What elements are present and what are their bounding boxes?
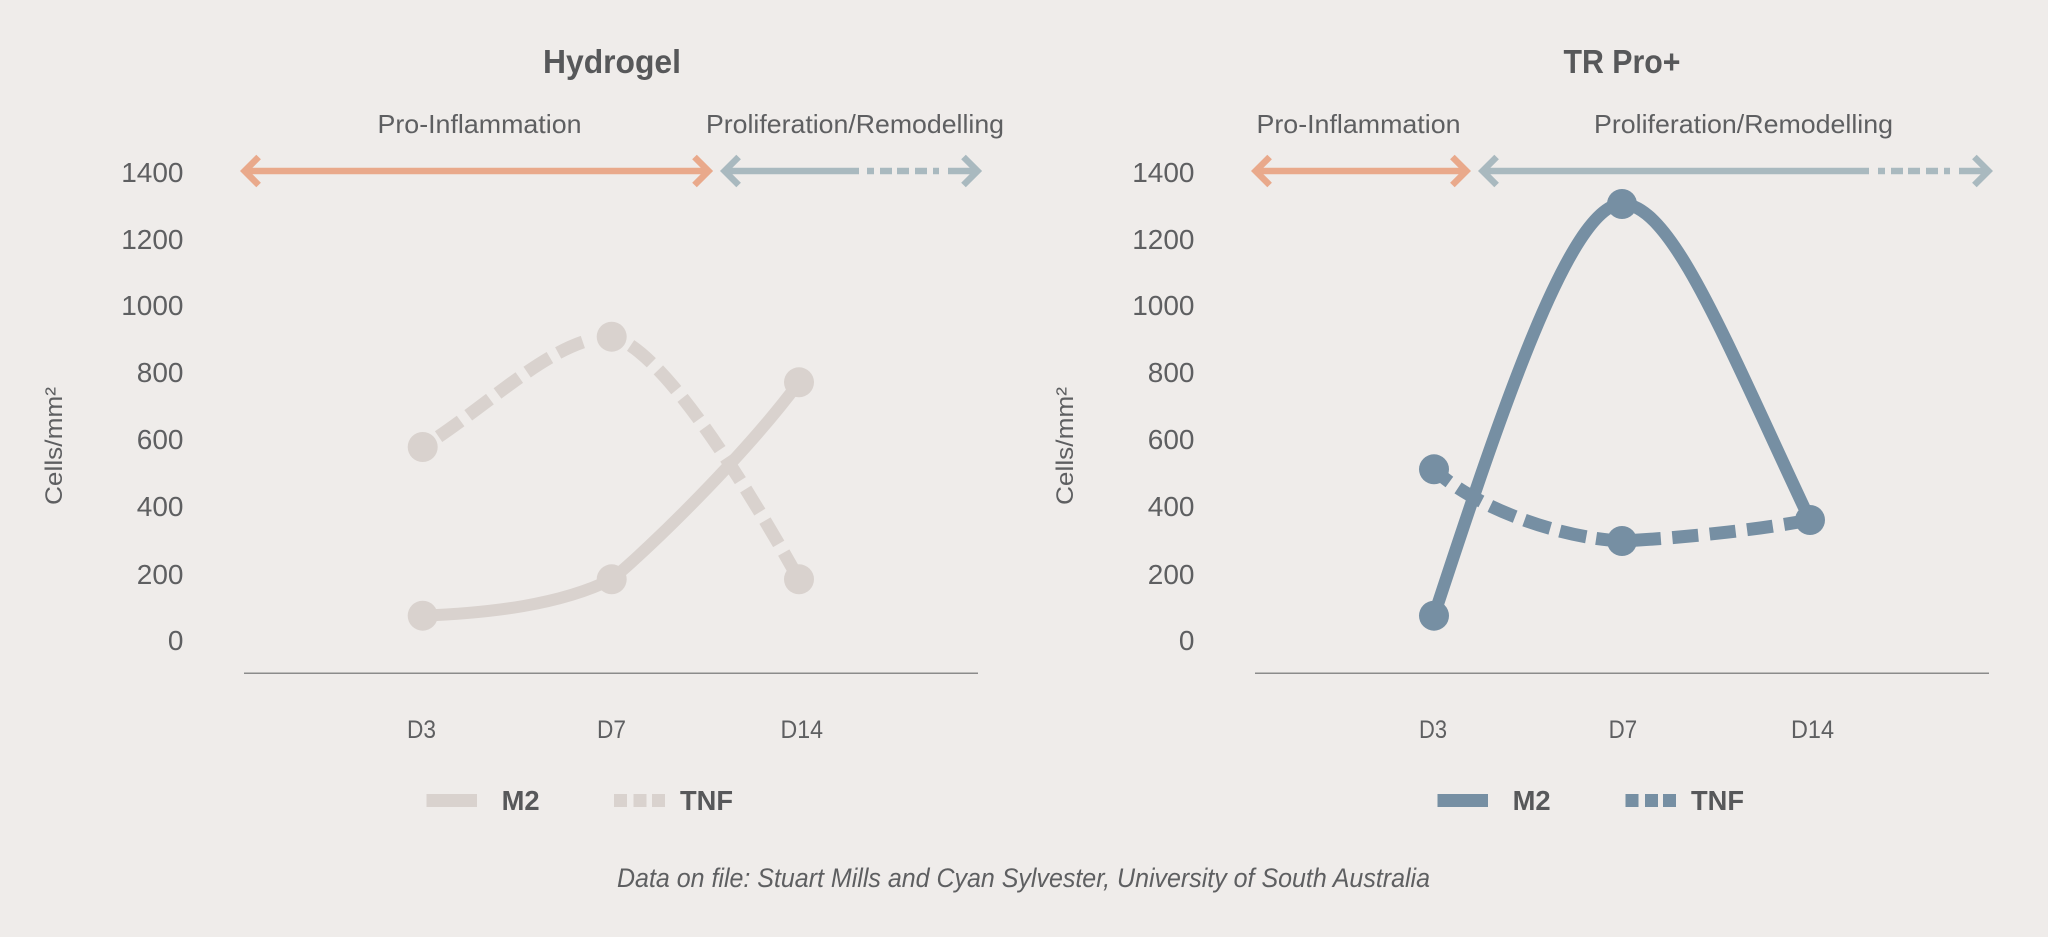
phase label: Proliferation/Remodelling: Proliferation/Remodelling — [1594, 109, 1893, 139]
panel: TR Pro+ chart — [1052, 43, 1989, 816]
y axis labels — [121, 157, 184, 656]
x axis labels — [1419, 716, 1834, 744]
y axis labels: 600 — [1148, 424, 1194, 455]
legend: Hydrogel — [426, 785, 733, 816]
y axis labels: 0 — [168, 625, 184, 656]
x axis labels: D7 — [1609, 716, 1637, 744]
y axis labels: 200 — [1148, 559, 1194, 590]
x axis line — [244, 672, 978, 674]
y axis labels: 200 — [137, 559, 184, 590]
y axis labels: 400 — [137, 491, 184, 522]
x axis labels — [407, 716, 823, 744]
y axis title: Cells/mm² — [1052, 387, 1079, 505]
legend: TR Pro+ — [1438, 785, 1744, 816]
phase label: Proliferation/Remodelling: Proliferation/Remodelling — [706, 109, 1004, 139]
data points Hydrogel — [408, 322, 814, 631]
phase label: Pro-Inflammation: Pro-Inflammation — [1256, 109, 1460, 139]
x axis labels: D3 — [407, 716, 436, 744]
legend: Hydrogel: M2 — [502, 785, 540, 816]
y axis labels: 1200 — [121, 224, 184, 255]
phase label: Pro-Inflammation: Pro-Inflammation — [378, 109, 582, 139]
x axis labels: D3 — [1419, 716, 1447, 744]
y axis labels: 800 — [137, 357, 184, 388]
y axis labels: 1400 — [121, 157, 184, 188]
arrow: proliferation span — [725, 157, 978, 185]
y axis labels: 1400 — [1132, 157, 1194, 188]
line: M2 Hydrogel — [423, 382, 799, 616]
panel: Hydrogel chart — [41, 43, 1004, 816]
arrow: pro-inflammation span — [1256, 157, 1466, 185]
y axis labels: 1000 — [1132, 290, 1194, 321]
line: TNF TR Pro+ — [1434, 469, 1810, 541]
heading: TR Pro+: TR Pro+ — [1564, 43, 1680, 80]
y axis labels: 400 — [1148, 491, 1194, 522]
x axis labels: D7 — [597, 716, 626, 744]
heading: Hydrogel: Hydrogel — [543, 43, 681, 80]
data points TR Pro+ — [1419, 189, 1825, 631]
arrow: proliferation span — [1483, 157, 1988, 185]
arrow: pro-inflammation span — [245, 157, 708, 185]
y axis labels: 800 — [1148, 357, 1194, 388]
legend: TR Pro+: M2 — [1513, 785, 1551, 816]
y axis labels: 0 — [1179, 625, 1194, 656]
x axis labels: D14 — [780, 716, 823, 744]
x axis labels: D14 — [1791, 716, 1834, 744]
line: TNF Hydrogel — [423, 337, 799, 579]
line: M2 TR Pro+ — [1434, 204, 1810, 616]
y axis labels — [1132, 157, 1194, 656]
x axis line — [1255, 672, 1989, 674]
y axis title: Cells/mm² — [41, 387, 68, 505]
y axis labels: 1200 — [1132, 224, 1194, 255]
y axis labels: 1000 — [121, 290, 184, 321]
legend: TR Pro+: TNF — [1691, 785, 1744, 816]
source note: Data on file: Stuart Mills and Cyan Sylvester, University of South Australia — [617, 863, 1430, 893]
legend: Hydrogel: TNF — [680, 785, 733, 816]
y axis labels: 600 — [137, 424, 184, 455]
